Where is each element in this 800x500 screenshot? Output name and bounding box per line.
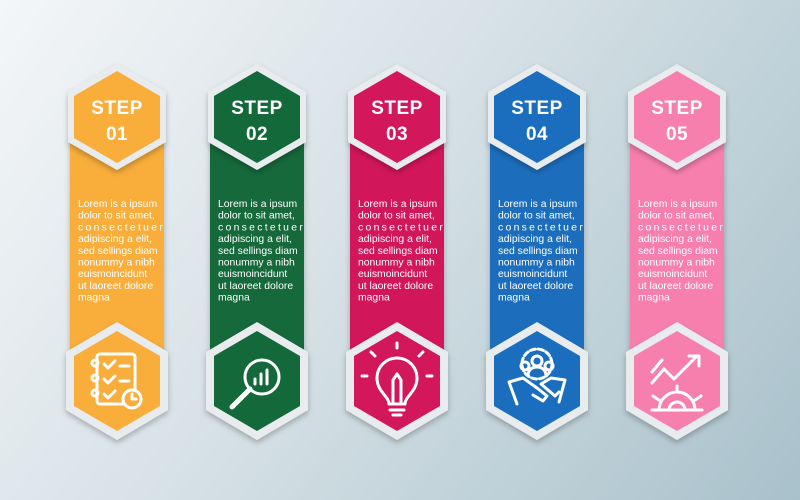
top hexagon: 04 <box>526 124 548 145</box>
body text: ut laoreet dolore <box>78 281 153 292</box>
body text: magna <box>638 293 670 304</box>
panel: step 05 <box>626 64 728 440</box>
bottom hexagon with icon: magnifier chart <box>206 322 308 440</box>
top hexagon: STEP <box>651 98 703 119</box>
body text: sed sellings diam <box>78 246 158 257</box>
bottom hexagon with icon: team handshake <box>486 322 588 440</box>
bottom hexagon with icon: checklist <box>66 322 168 440</box>
body text: magna <box>358 293 390 304</box>
body text: Lorem is a ipsum <box>218 199 297 210</box>
body text: Lorem is a ipsum <box>498 199 577 210</box>
body text: Lorem is a ipsum <box>78 199 157 210</box>
body text: sed sellings diam <box>638 246 718 257</box>
body text: consectetuer <box>498 222 585 233</box>
strip <box>630 140 724 355</box>
body text: dolor to sit amet, <box>638 211 715 222</box>
top hexagon: 01 <box>106 124 128 145</box>
top hexagon: STEP <box>91 98 143 119</box>
strip <box>70 140 164 355</box>
body text: euismoincidunt <box>358 269 427 280</box>
top hexagon: STEP <box>371 98 423 119</box>
body text: adipiscing a elit, <box>358 234 432 245</box>
body text: nonummy a nibh <box>498 258 575 268</box>
body text: adipiscing a elit, <box>218 234 292 245</box>
body text: nonummy a nibh <box>358 258 435 268</box>
body text: adipiscing a elit, <box>498 234 572 245</box>
body text: ut laoreet dolore <box>358 281 433 292</box>
body text: magna <box>218 293 250 304</box>
body text: euismoincidunt <box>78 269 147 280</box>
panel: step 03 <box>346 64 448 440</box>
strip <box>210 140 304 355</box>
body text: dolor to sit amet, <box>218 211 295 222</box>
top hexagon <box>208 64 306 170</box>
body text: euismoincidunt <box>498 269 567 280</box>
body text: ut laoreet dolore <box>638 281 713 292</box>
top hexagon <box>488 64 586 170</box>
panel: step 01 <box>66 64 168 440</box>
top hexagon: 02 <box>246 124 268 145</box>
strip <box>350 140 444 355</box>
body text: ut laoreet dolore <box>218 281 293 292</box>
top hexagon <box>348 64 446 170</box>
body text: sed sellings diam <box>498 246 578 257</box>
body text: dolor to sit amet, <box>78 211 155 222</box>
bottom hexagon with icon: growth gear <box>626 322 728 440</box>
body text: nonummy a nibh <box>78 258 155 268</box>
body text: magna <box>78 293 110 304</box>
bottom hexagon with icon: light bulb pencil <box>346 322 448 440</box>
body text: sed sellings diam <box>218 246 298 257</box>
body text: dolor to sit amet, <box>498 211 575 222</box>
top hexagon: 05 <box>666 124 688 145</box>
body text: magna <box>498 293 530 304</box>
body text: consectetuer <box>78 222 165 233</box>
body text: dolor to sit amet, <box>358 211 435 222</box>
body text: consectetuer <box>358 222 445 233</box>
strip <box>490 140 584 355</box>
body text: sed sellings diam <box>358 246 438 257</box>
panel: step 02 <box>206 64 308 440</box>
body text: consectetuer <box>638 222 725 233</box>
body text: ut laoreet dolore <box>498 281 573 292</box>
body text: euismoincidunt <box>638 269 707 280</box>
top hexagon: 03 <box>386 124 408 145</box>
body text: nonummy a nibh <box>218 258 295 268</box>
body text: adipiscing a elit, <box>638 234 712 245</box>
body text: adipiscing a elit, <box>78 234 152 245</box>
panel: step 04 <box>486 64 588 440</box>
body text: Lorem is a ipsum <box>638 199 717 210</box>
body text: euismoincidunt <box>218 269 287 280</box>
body text: nonummy a nibh <box>638 258 715 268</box>
top hexagon: STEP <box>511 98 563 119</box>
top hexagon: STEP <box>231 98 283 119</box>
top hexagon <box>628 64 726 170</box>
top hexagon <box>68 64 166 170</box>
body text: Lorem is a ipsum <box>358 199 437 210</box>
body text: consectetuer <box>218 222 305 233</box>
